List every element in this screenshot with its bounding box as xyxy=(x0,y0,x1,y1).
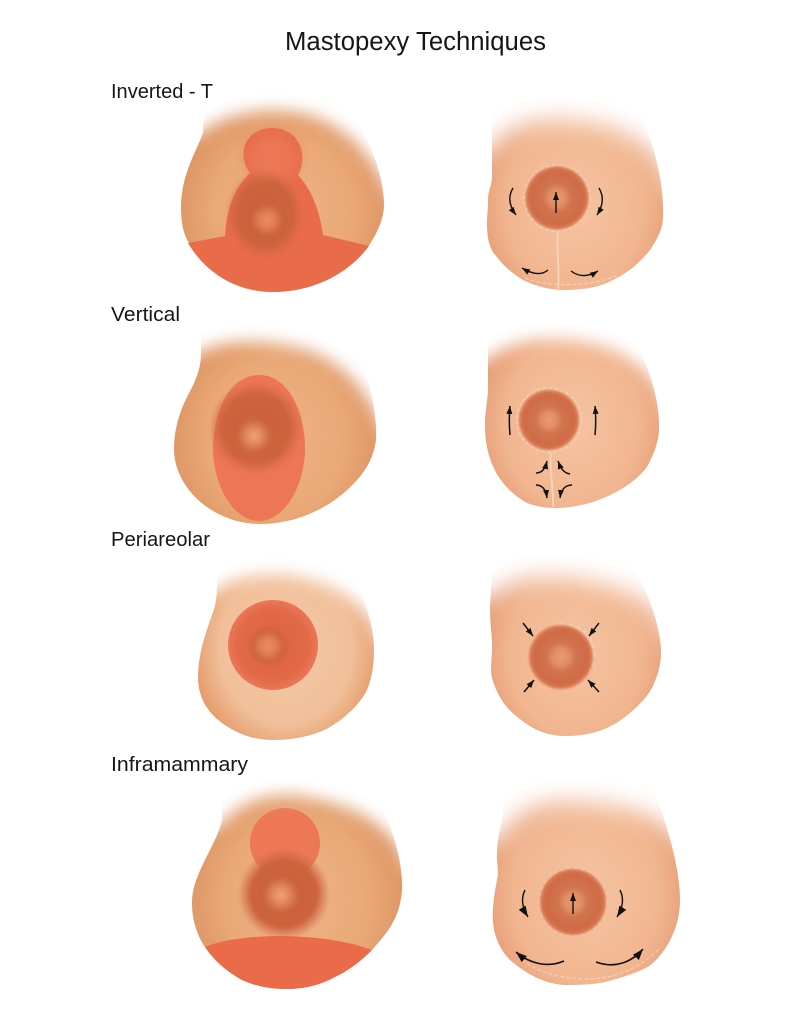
label: Inverted - T: Inverted - T xyxy=(111,81,213,103)
label: Periareolar: Periareolar xyxy=(111,529,210,551)
label: Vertical: Vertical xyxy=(111,304,180,326)
illustration: periareolar after xyxy=(490,561,661,736)
label: Inframammary: Inframammary xyxy=(111,754,248,776)
illustration: inframammary after xyxy=(492,786,680,985)
illustration: periareolar before xyxy=(198,564,374,740)
illustration: inverted-T before xyxy=(181,98,384,292)
title: Mastopexy Techniques xyxy=(285,28,546,56)
illustration: vertical before xyxy=(174,330,376,524)
illustration: inverted-T after xyxy=(487,104,664,290)
illustration: vertical after xyxy=(485,328,659,508)
illustration: inframammary before xyxy=(192,784,402,989)
